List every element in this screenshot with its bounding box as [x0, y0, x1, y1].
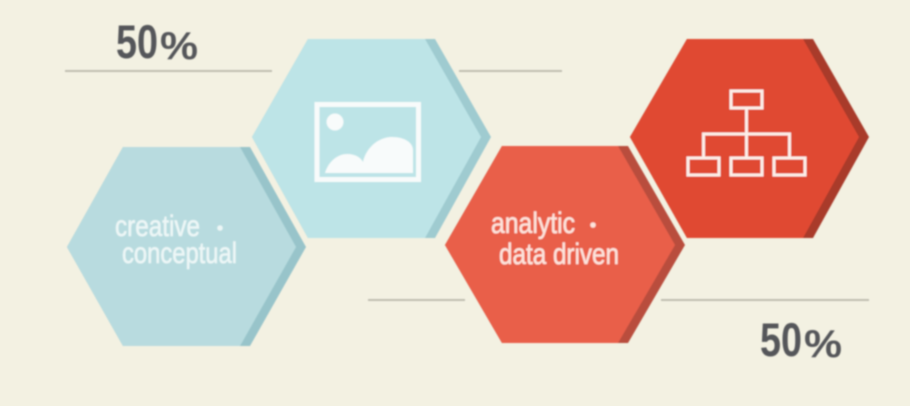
icon: picture	[317, 104, 418, 180]
top-left percentage: %	[160, 25, 198, 68]
hexagon: image icon	[252, 39, 491, 238]
label: analytic data driven: data driven	[499, 238, 619, 271]
label: creative conceptual: creative	[115, 210, 200, 243]
icon: organisation chart	[688, 91, 805, 175]
hexagon: analytic data driven	[445, 146, 685, 343]
bottom-right percentage: %	[804, 323, 842, 366]
label: creative conceptual	[115, 210, 237, 270]
hexagon: network icon	[630, 39, 869, 238]
divider lines	[65, 71, 869, 300]
hexagon: creative conceptual	[67, 147, 306, 346]
bottom-right percentage: 50	[760, 313, 802, 366]
label: analytic data driven	[491, 207, 619, 271]
label: creative conceptual: conceptual	[122, 237, 237, 270]
label: analytic data driven: analytic	[491, 207, 575, 240]
top-left percentage: 50	[116, 15, 158, 68]
